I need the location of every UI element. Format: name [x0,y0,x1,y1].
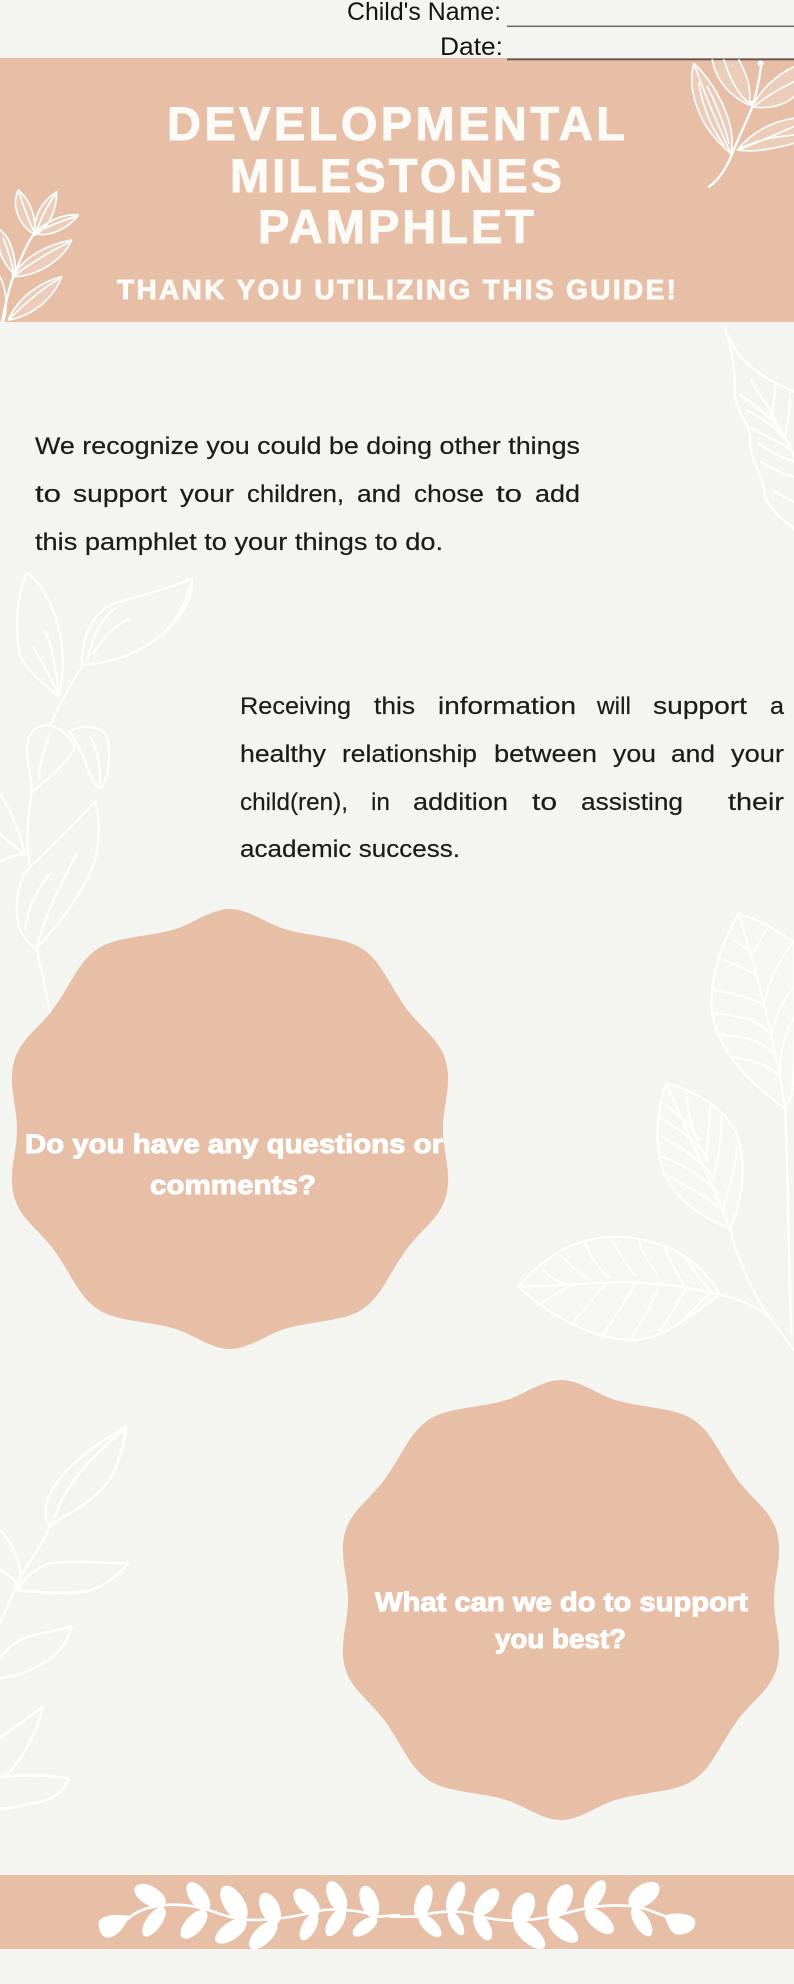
paragraph: benefits: child(ren), [240,789,348,816]
paragraph: recognition [35,433,580,556]
scalloped badge [343,1380,779,1820]
title [117,97,676,305]
left sprig [99,1878,400,1954]
paragraph: benefits: academic success. [240,836,460,863]
paragraph: recognition: add [535,481,580,508]
paragraph: recognition: children, [247,481,344,508]
paragraph: benefits: between [494,741,597,768]
paragraph: benefits: relationship [342,741,477,768]
title line 3: PAMPHLET [258,200,534,253]
header leaves: top right [692,60,794,187]
paragraph: recognition: We recognize you could be doing other things [35,433,580,460]
subtitle: THANK YOU UTILIZING THIS GUIDE! [117,274,676,305]
paragraph: benefits: addition [413,789,508,816]
paragraph: benefits: to [532,789,557,816]
decorative leaf: right middle branch [518,913,794,1350]
paragraph: recognition: to [496,481,522,508]
title line 2: MILESTONES [230,149,562,202]
callout: how can we support: you best? [495,1624,626,1654]
paragraph: benefits: this [374,693,415,720]
paragraph: benefits: your [731,741,784,768]
title line 1: DEVELOPMENTAL [167,97,625,150]
paragraph: benefits [240,693,785,863]
header leaves: left [0,190,78,323]
decorative leaf: lower left branch [0,1427,128,1808]
date label: Date: [440,33,503,61]
question text: Do you have any questions or [25,1129,444,1159]
paragraph: recognition: support [73,481,167,508]
paragraph: recognition: your [180,481,234,508]
paragraph: benefits: their [728,789,784,816]
callout: how can we support [343,1380,779,1820]
paragraph: benefits: healthy [240,741,326,768]
callout: questions or comments [12,909,448,1349]
question text: What can we do to support [375,1587,748,1617]
paragraph: recognition: chose [414,481,484,508]
paragraph: benefits: support [653,693,747,720]
paragraph: benefits: and [671,741,715,768]
paragraph: benefits: in [371,789,390,816]
child's name line [507,26,794,27]
scalloped badge [12,909,448,1349]
paragraph: recognition: to [35,481,61,508]
name and date fields [347,0,794,61]
paragraph: benefits: Receiving [240,693,351,720]
right sprig [390,1876,695,1954]
decorative leaf: left middle branch [0,573,192,1020]
callout: questions or comments: comments? [150,1170,316,1200]
paragraph: benefits: will [596,693,631,720]
decorative leaf: top right of body [725,328,794,528]
paragraph: benefits: assisting [581,789,683,816]
footer band [0,1875,794,1949]
paragraph: benefits: you [613,741,656,768]
paragraph: benefits: a [770,693,785,720]
paragraph: recognition: and [357,481,401,508]
date line [507,58,794,60]
header band [0,58,794,322]
paragraph: recognition: this pamphlet to your things to do. [35,529,443,556]
footer ornament: laurel branch [99,1876,695,1954]
paragraph: benefits: information [438,693,576,720]
